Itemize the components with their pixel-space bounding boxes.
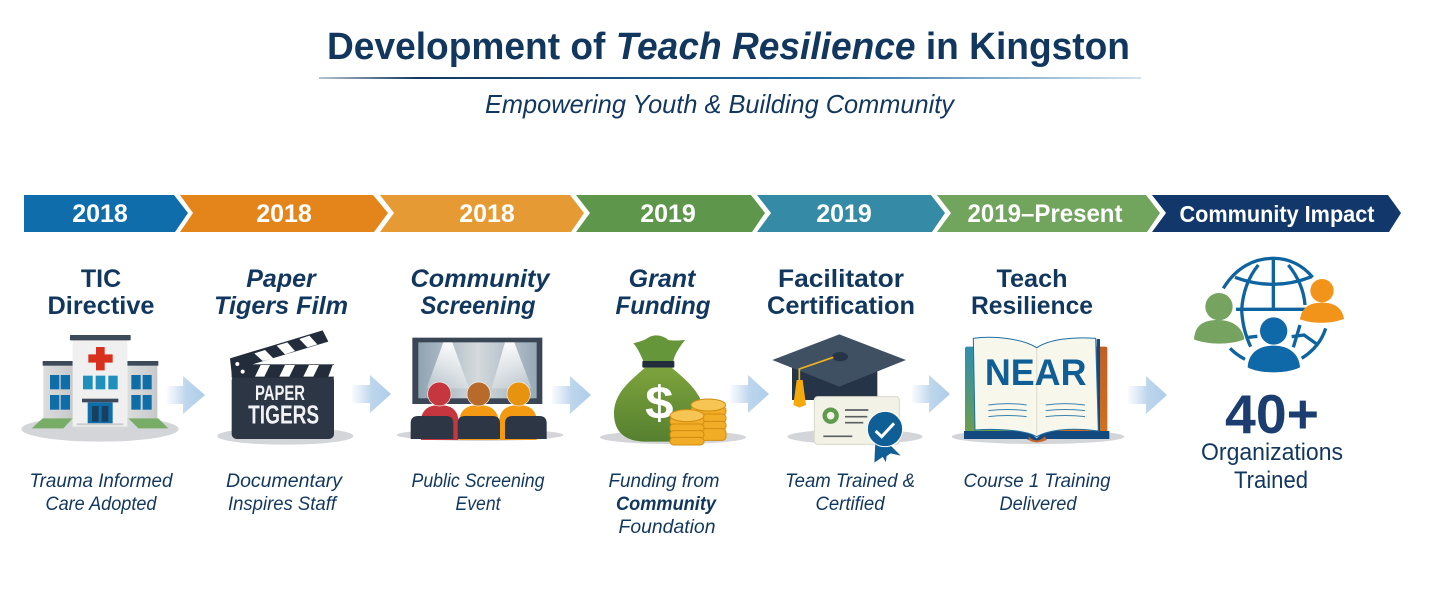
heading: Paper Tigers Film: Tigers Film xyxy=(214,292,348,320)
column: TIC Directive xyxy=(21,265,179,515)
stage banner: 2019–Present xyxy=(937,195,1160,232)
icon: hospital xyxy=(21,335,179,442)
description: Funding from Community Foundation: Foundation xyxy=(618,517,716,538)
label: Organizations Trained: Organizations xyxy=(1201,439,1343,466)
column: Community Impact xyxy=(1194,258,1344,494)
stage banner: 2018: 2018 xyxy=(72,200,128,228)
stage banner: 2019 green: 2019 xyxy=(640,200,696,228)
arrow xyxy=(1128,376,1167,414)
arrow xyxy=(352,375,391,413)
description: Team Trained & Certified: Team Trained & xyxy=(785,471,915,492)
description: Public Screening Event: Public Screening xyxy=(412,471,545,492)
heading: Paper Tigers Film: Paper xyxy=(246,265,317,293)
stage banner: 2019 teal: 2019 xyxy=(816,200,872,228)
stage banner: 2019 green xyxy=(576,195,765,232)
stat: 40+: 40+ xyxy=(1225,383,1319,445)
column: Facilitator Certification xyxy=(767,265,923,515)
heading: TIC Directive: Directive xyxy=(48,292,155,320)
stage banner: 2019 teal xyxy=(757,195,945,232)
timeline banner xyxy=(24,195,1401,232)
arrow xyxy=(552,376,591,414)
heading: TIC Directive: TIC xyxy=(81,265,121,293)
heading: Teach Resilience: Resilience xyxy=(971,292,1093,320)
column: Community Screening xyxy=(397,265,563,515)
stage banner: 2018 amber: 2018 xyxy=(459,200,515,228)
stage banner: 2018 xyxy=(24,195,188,232)
arrow xyxy=(730,375,769,413)
stage banner: Community Impact: Community Impact xyxy=(1180,201,1375,227)
description: Course 1 Training Delivered: Course 1 Training xyxy=(964,471,1111,492)
description: Public Screening Event: Event xyxy=(456,494,501,515)
stage banner: 2018 amber xyxy=(380,195,584,232)
heading: Grant Funding: Funding xyxy=(616,292,710,320)
heading: Community Screening: Screening xyxy=(420,292,536,320)
icon: cinema screening xyxy=(397,338,563,441)
heading: Grant Funding: Grant xyxy=(629,265,697,293)
arrow xyxy=(167,376,205,414)
description: Course 1 Training Delivered: Delivered xyxy=(1000,494,1078,515)
heading: Teach Resilience: Teach xyxy=(996,265,1068,293)
label: Organizations Trained: Trained xyxy=(1234,467,1308,494)
description: Funding from Community Foundation: Funding from xyxy=(608,471,720,492)
icon: graduation cap and certificate xyxy=(772,334,923,463)
icon: clapperboard xyxy=(217,330,353,445)
description: Trauma Informed Care Adopted: Trauma Informed xyxy=(30,471,174,492)
description: Documentary Inspires Staff: Inspires Staff xyxy=(228,494,338,515)
arrow xyxy=(912,375,950,413)
icon: money bag and coins xyxy=(600,335,746,445)
description: Team Trained & Certified: Certified xyxy=(816,494,886,515)
column: Teach Resilience xyxy=(952,265,1124,515)
column: Grant Funding xyxy=(600,265,746,538)
heading: Facilitator Certification: Certification xyxy=(767,292,915,320)
icon: clapperboard: TIGERS xyxy=(248,401,319,429)
subtitle: Empowering Youth & Building Community xyxy=(485,89,956,119)
icon: open NEAR book xyxy=(952,337,1124,444)
stage banner: 2019–Present: 2019–Present xyxy=(968,200,1123,228)
description: Trauma Informed Care Adopted: Care Adopted xyxy=(46,494,158,515)
heading: Community Screening: Community xyxy=(410,265,551,293)
stage banner: Community Impact xyxy=(1152,195,1401,232)
icon: open NEAR book: NEAR xyxy=(985,351,1087,393)
heading: Facilitator Certification: Facilitator xyxy=(778,265,904,293)
stage banner: 2018 orange xyxy=(180,195,388,232)
description: Documentary Inspires Staff: Documentary xyxy=(226,471,344,492)
stage banner: 2018 orange: 2018 xyxy=(256,200,312,228)
icon: clapperboard: PAPER xyxy=(255,382,305,405)
icon: globe with people xyxy=(1194,258,1344,372)
icon: money bag and coins: $ xyxy=(645,377,673,429)
description: Funding from Community Foundation: Community xyxy=(616,494,717,515)
title: Development of Teach Resilience in Kingston xyxy=(327,26,1130,68)
column: Paper Tigers Film xyxy=(214,265,353,515)
